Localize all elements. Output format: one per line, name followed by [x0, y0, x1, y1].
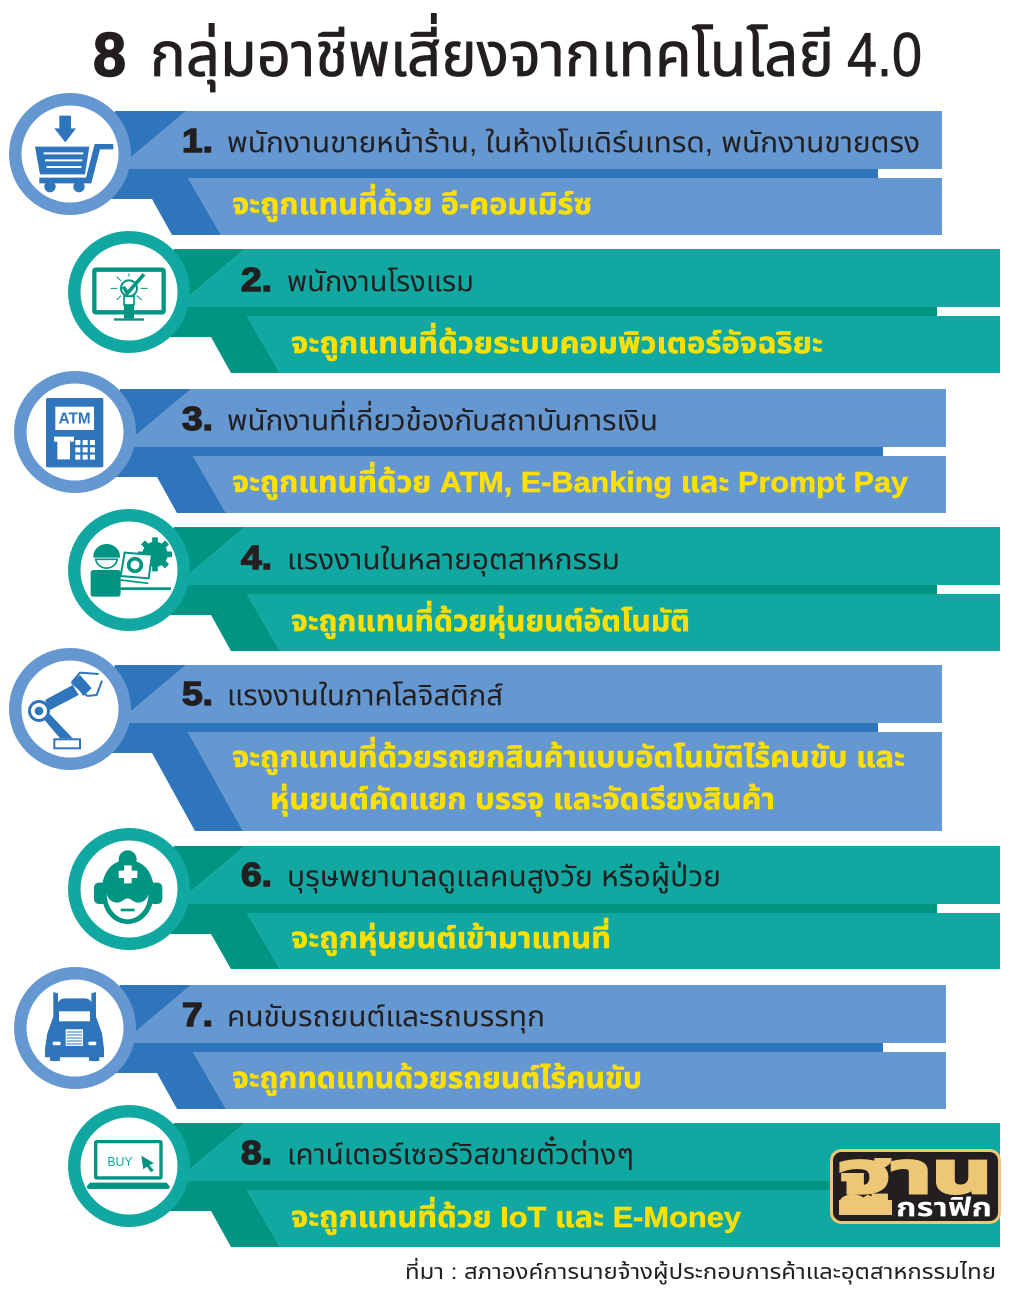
item 5 number: 5.	[182, 675, 213, 712]
panel: item 6	[68, 828, 1000, 969]
item 3 replacement: จะถูกแทนที่ด้วย ATM, E-Banking และ Prompt Pay	[232, 461, 908, 500]
panel: item 5	[9, 648, 942, 831]
item 6 number: 6.	[241, 856, 272, 893]
panel: item 3	[14, 371, 946, 513]
item 8 occupation: เคาน์เตอร์เซอร์วิสขายตั๋วต่างๆ	[287, 1136, 634, 1171]
icon: shopping cart	[35, 116, 113, 192]
title: 8	[93, 21, 126, 90]
icon: laptop buy	[87, 1142, 170, 1189]
item 8 number: 8.	[241, 1134, 272, 1171]
item 2 replacement: จะถูกแทนที่ด้วยระบบคอมพิวเตอร์อัจฉริยะ	[291, 322, 823, 361]
icon: monitor with light bulb	[94, 270, 164, 321]
item 5 occupation: แรงงานในภาคโลจิสติกส์	[227, 680, 503, 712]
panel: item 1	[9, 93, 942, 235]
panel: item 2	[68, 231, 1000, 373]
item 5 replacement	[232, 736, 905, 816]
item 4 replacement: จะถูกแทนที่ด้วยหุ่นยนต์อัตโนมัติ	[291, 600, 690, 639]
icon: ATM machine	[46, 398, 103, 467]
item 5 replacement: จะถูกแทนที่ด้วยรถยกสินค้าแบบอัตโนมัติไร้คนขับ และ	[232, 736, 905, 775]
icon: ATM machine: ATM	[59, 410, 91, 427]
source note: ที่มา : สภาองค์การนายจ้างผู้ประกอบการค้าและอุตสาหกรรมไทย	[405, 1257, 996, 1285]
item 3 occupation: พนักงานที่เกี่ยวข้องกับสถาบันการเงิน	[227, 400, 658, 437]
item 6 replacement: จะถูกหุ่นยนต์เข้ามาแทนที่	[291, 917, 611, 956]
icon: worker with gear	[91, 537, 172, 597]
logo	[832, 1141, 1000, 1222]
item 4 number: 4.	[241, 539, 272, 576]
panel: item 7	[14, 967, 946, 1109]
item 8 replacement: จะถูกแทนที่ด้วย IoT และ E-Money	[291, 1196, 741, 1235]
item 1 number: 1.	[182, 122, 213, 159]
item 2 occupation: พนักงานโรงแรม	[287, 266, 474, 298]
item 7 occupation: คนขับรถยนต์และรถบรรทุก	[227, 1001, 545, 1033]
icon: nurse	[94, 850, 162, 924]
title: 4.0	[847, 21, 922, 90]
item 2 number: 2.	[241, 261, 272, 298]
item 4 occupation: แรงงานในหลายอุตสาหกรรม	[287, 544, 620, 576]
logo: กราฟิก	[896, 1192, 992, 1222]
item 7 number: 7.	[182, 996, 213, 1033]
item 1 occupation: พนักงานขายหน้าร้าน, ในห้างโมเดิร์นเทรด, พนักงานขายตรง	[227, 127, 920, 159]
icon: robot arm	[28, 673, 102, 748]
item 1 replacement: จะถูกแทนที่ด้วย อี-คอมเมิร์ซ	[232, 183, 592, 222]
panel: item 4	[68, 509, 1000, 651]
item 7 replacement: จะถูกทดแทนด้วยรถยนต์ไร้คนขับ	[232, 1063, 642, 1096]
icon: laptop buy: BUY	[107, 1155, 133, 1169]
item 5 replacement: หุ่นยนต์คัดแยก บรรจุ และจัดเรียงสินค้า	[270, 784, 775, 816]
title: กลุ่มอาชีพเสี่ยงจากเทคโนโลยี	[150, 13, 834, 92]
item 3 number: 3.	[182, 400, 213, 437]
logo: ฐาน	[838, 1141, 992, 1206]
icon: truck	[45, 992, 104, 1061]
item 6 occupation: บุรุษพยาบาลดูแลคนสูงวัย หรือผู้ป่วย	[287, 861, 721, 894]
panel: item 8	[68, 1105, 1000, 1247]
